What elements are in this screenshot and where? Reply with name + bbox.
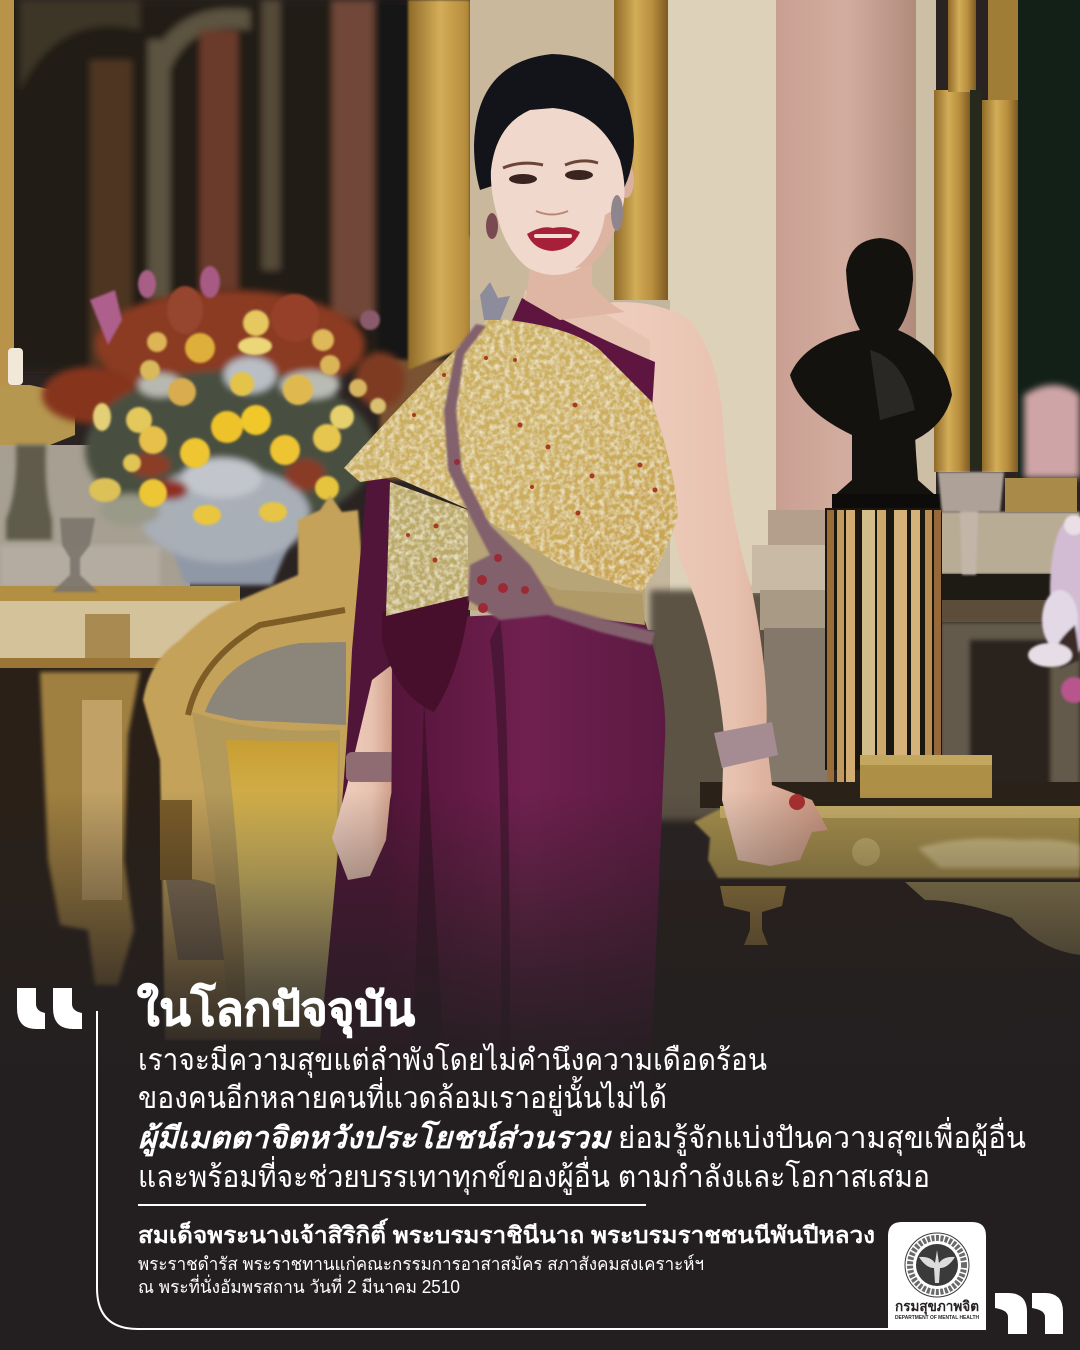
foliage mass [42, 290, 405, 563]
viewer-left arm [332, 660, 398, 880]
neck [525, 240, 625, 320]
table apron [905, 882, 1080, 955]
earrings [486, 213, 498, 239]
cushion satin [226, 740, 338, 1010]
maroon shoulder band [510, 298, 655, 410]
pink flowers right edge [1028, 515, 1080, 703]
striped pedestal [825, 508, 942, 770]
mantel ornaments [85, 614, 130, 658]
beige wall right [668, 0, 776, 620]
bust figure [790, 238, 952, 495]
beige wall centre [470, 0, 616, 330]
gold frame centre right [614, 0, 668, 302]
floor [660, 880, 1080, 1350]
lower bodice embroidered [386, 482, 468, 616]
table leg [720, 886, 786, 945]
torso under shawl [468, 500, 645, 620]
vase reflection on wall [6, 445, 52, 540]
right bracelet [714, 722, 778, 768]
pedestal cap [832, 494, 940, 510]
quote frame line [97, 1011, 888, 1329]
column base [768, 510, 830, 555]
gold left edge frame [0, 0, 14, 385]
mantel gold band [0, 586, 240, 601]
face [491, 108, 625, 275]
opening quote mark [17, 988, 82, 1029]
skirt [388, 608, 665, 1090]
wall right of column [916, 0, 936, 500]
quote heading: ในโลกปัจจุบัน [137, 982, 416, 1038]
skirt folds [412, 700, 445, 1080]
wall behind flowers [0, 445, 190, 595]
viewer-right arm and shoulder [590, 302, 828, 866]
gold ledge under mirror [0, 385, 75, 445]
closing quote mark [995, 1293, 1063, 1334]
department logo: กรมสุขภาพจิต [895, 1298, 979, 1315]
shelf right [940, 512, 1080, 574]
vase [165, 530, 295, 585]
eyebrows and eyes [503, 161, 598, 168]
glass ornament [52, 518, 98, 592]
wall behind torso [470, 300, 670, 630]
dark green mirror [1018, 0, 1080, 480]
nose shadow [536, 211, 568, 214]
cheek shadow [575, 205, 622, 268]
quote body: ของคนอีกหลายคนที่แวดล้อมเราอยู่นั้นไม่ได้ [138, 1076, 667, 1116]
chair arm scroll [166, 878, 224, 960]
source text: ณ พระที่นั่งอัมพรสถาน วันที่ 2 มีนาคม 2510 [138, 1274, 460, 1297]
chair frame [143, 495, 366, 1040]
black bust on pedestal [790, 238, 1004, 790]
department logo [888, 1222, 986, 1330]
pink marble column [776, 0, 916, 515]
quote body: ย่อมรู้จักแบ่งปันความสุขเพื่อผู้อื่น [618, 1117, 1026, 1157]
flower arrangement [42, 266, 405, 592]
attribution name: สมเด็จพระนางเจ้าสิริกิติ์ พระบรมราชินีนาถ พระบรมราชชนนีพันปีหลวง [138, 1218, 875, 1248]
gold shawl [344, 318, 678, 592]
quote body: เราจะมีความสุขแต่ลำพังโดยไม่คำนึงความเดือดร้อน [138, 1042, 767, 1079]
source text [138, 1254, 704, 1297]
hair [474, 54, 634, 192]
white candle glow [8, 348, 23, 385]
orchids and blooms [89, 266, 386, 525]
gold armchair [143, 495, 366, 1040]
divider [138, 1204, 646, 1206]
lower left dark recess [0, 668, 180, 988]
quote body: ผู้มีเมตตาจิตหวังประโยชน์ส่วนรวม [138, 1120, 612, 1157]
central figure in Thai dress [318, 54, 828, 1090]
chair cushion [192, 712, 340, 1010]
shawl jewel dots [406, 356, 658, 562]
mantel panel [0, 598, 240, 668]
quote body: และพร้อมที่จะช่วยบรรเทาทุกข์ของผู้อื่น ตามกำลังและโอกาสเสมอ [138, 1156, 930, 1196]
right ear [618, 162, 634, 198]
dark lower wall behind arm [650, 590, 768, 820]
frieze scroll ornament [918, 839, 1080, 868]
inner arch [188, 610, 345, 715]
brooch [480, 282, 510, 320]
belt rubies [454, 459, 529, 613]
left bracelet [346, 752, 396, 782]
quote body [138, 1042, 1026, 1196]
dark gradient overlay [0, 790, 1080, 1110]
pleated fold at waist [382, 596, 470, 712]
ring [789, 794, 805, 810]
patch of bloom behind shawl [380, 360, 480, 480]
source text: พระราชดำรัส พระราชทานแก่คณะกรรมการอาสาสมัคร สภาสังคมสงเคราะห์ฯ [138, 1254, 704, 1274]
gold table [694, 755, 1080, 955]
department logo: DEPARTMENT OF MENTAL HEALTH [895, 1315, 979, 1321]
table top frieze [694, 808, 1080, 878]
glass vase on shelf [938, 472, 1004, 575]
lips [527, 227, 580, 251]
jeweled chain on shawl [444, 324, 655, 645]
gold frame beside mirror [408, 0, 488, 370]
chest [520, 290, 650, 400]
mantel legs [40, 672, 140, 985]
back sash, pleated [318, 477, 395, 1060]
gold belt [500, 570, 645, 625]
gold frames right [934, 90, 970, 472]
mirror with arches, top left [0, 0, 412, 370]
dark footer panel [0, 1110, 1080, 1350]
chair upholstery [205, 642, 346, 725]
gold box [860, 755, 992, 798]
